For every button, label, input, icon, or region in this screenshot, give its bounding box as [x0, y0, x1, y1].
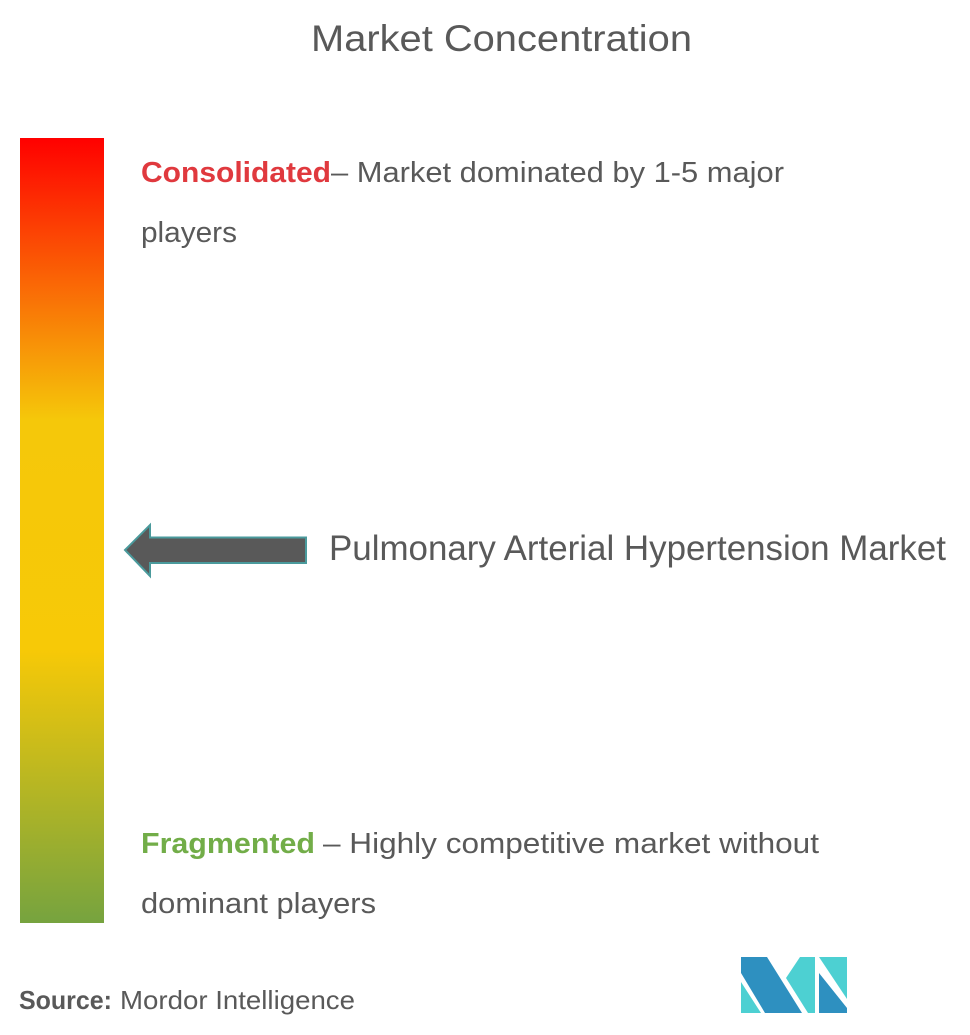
text block: consolidated: – Market dominated by 1-5 major: [331, 157, 784, 189]
source line: Mordor Intelligence: [120, 985, 355, 1015]
text block: consolidated: Consolidated: [141, 157, 331, 189]
text block: consolidated: players: [141, 217, 237, 249]
icon: Mordor Intelligence logo: [741, 957, 847, 1013]
arrow pointing to scale: [125, 525, 306, 576]
gradient scale bar: [20, 138, 104, 923]
source line: [19, 985, 355, 1015]
title: Market Concentration: [311, 18, 692, 59]
text block: fragmented: – Highly competitive market without: [323, 828, 819, 860]
text block: fragmented: dominant players: [141, 888, 376, 920]
text block: fragmented: [141, 828, 819, 920]
source line: Source:: [19, 985, 112, 1015]
market label: Pulmonary Arterial Hypertension Market: [329, 529, 946, 568]
text block: consolidated: [141, 157, 784, 249]
text block: fragmented: Fragmented: [141, 828, 315, 860]
